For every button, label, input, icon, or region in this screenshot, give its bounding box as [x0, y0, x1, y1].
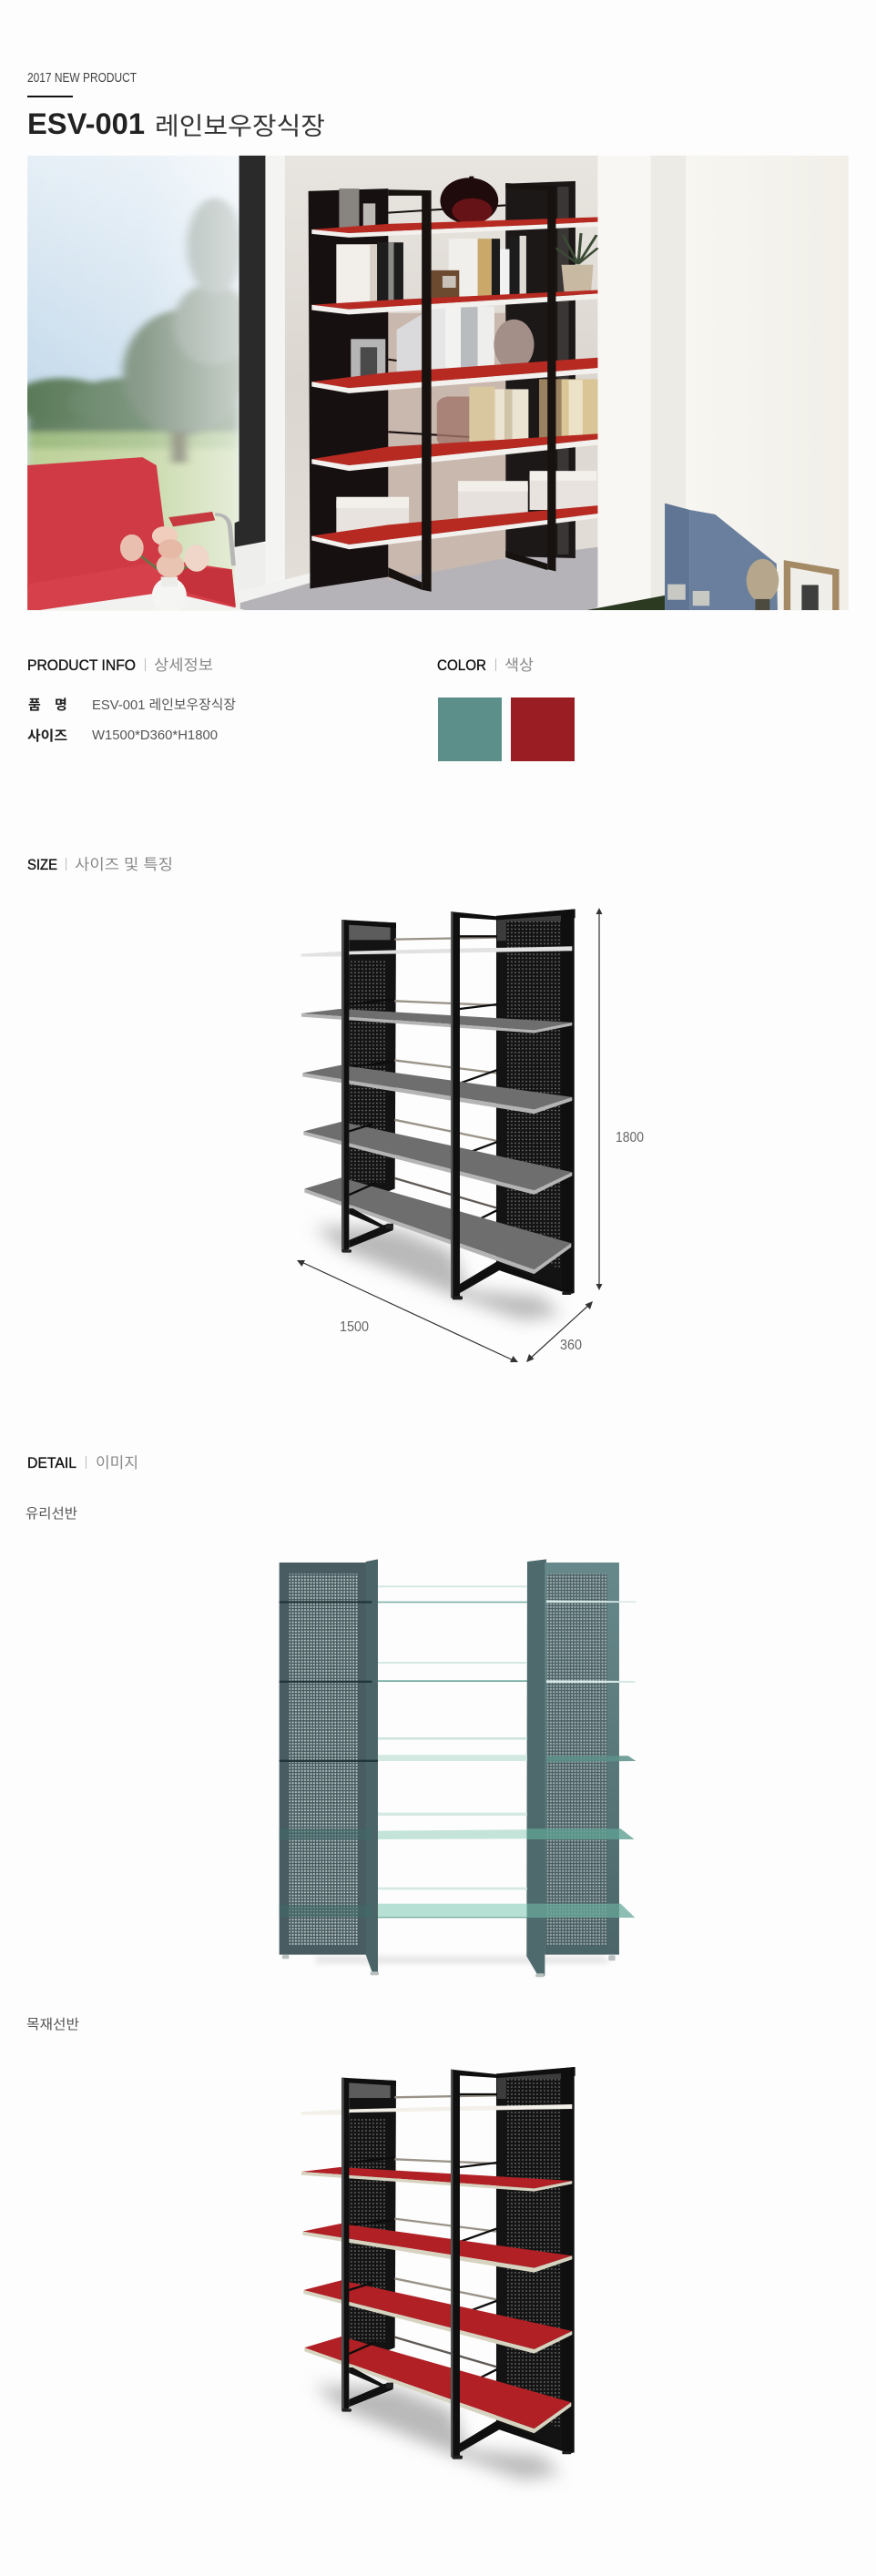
title: ESV-001	[27, 107, 145, 140]
heading: size: 사이즈 및 특징	[75, 856, 173, 873]
dimension label: 1800: 1800	[616, 1130, 644, 1145]
size row: 사이즈	[27, 728, 67, 744]
heading: detail	[27, 1454, 138, 1471]
flower vase	[39, 526, 246, 613]
shelf unit in photo	[309, 181, 576, 588]
dimension arrows	[297, 908, 603, 1362]
glass shelf unit	[280, 1559, 636, 1977]
size diagram shelf: grey shelves	[301, 909, 576, 1320]
product name row	[28, 697, 236, 713]
heading: product info: 상세정보	[154, 657, 213, 674]
size row	[27, 728, 218, 744]
heading: product info	[27, 657, 213, 674]
color swatches	[438, 697, 575, 761]
heading: size: SIZE	[27, 856, 57, 873]
heading: detail: 이미지	[96, 1454, 138, 1471]
title: 레인보우장식장	[155, 113, 325, 140]
dimension label: 1500: 1500	[340, 1319, 369, 1335]
product name row: 명	[55, 697, 67, 713]
glass unit feet	[282, 1955, 616, 1977]
size row: W1500*D360*H1800	[92, 728, 218, 743]
glass shelves	[280, 1585, 636, 1918]
heading: size	[27, 856, 173, 873]
wood shelf unit: red shelves	[301, 2067, 576, 2479]
sofa	[27, 457, 236, 610]
title	[27, 107, 325, 140]
product name row: 품	[28, 697, 41, 713]
eyebrow: 2017 new product: 2017 NEW PRODUCT	[27, 71, 137, 86]
sub heading: wood shelf: 목재선반	[26, 2017, 79, 2032]
sub heading: glass shelf: 유리선반	[25, 1506, 77, 1522]
front posts of photo shelf	[388, 183, 555, 592]
red shelves in photo	[311, 217, 597, 549]
product name row: ESV-001 레인보우장식장	[92, 697, 236, 713]
heading: product info: PRODUCT INFO	[27, 657, 136, 674]
heading: color: COLOR	[437, 657, 486, 674]
dimension label: 360: 360	[560, 1338, 582, 1353]
shelf objects	[336, 177, 597, 540]
binders, sculpture and picture frame	[665, 504, 839, 610]
heading: detail: DETAIL	[27, 1454, 76, 1471]
hero photo: bookshelf in room	[11, 156, 849, 613]
heading: color: 색상	[504, 657, 534, 674]
title rule	[27, 96, 73, 97]
heading: color	[437, 657, 534, 674]
